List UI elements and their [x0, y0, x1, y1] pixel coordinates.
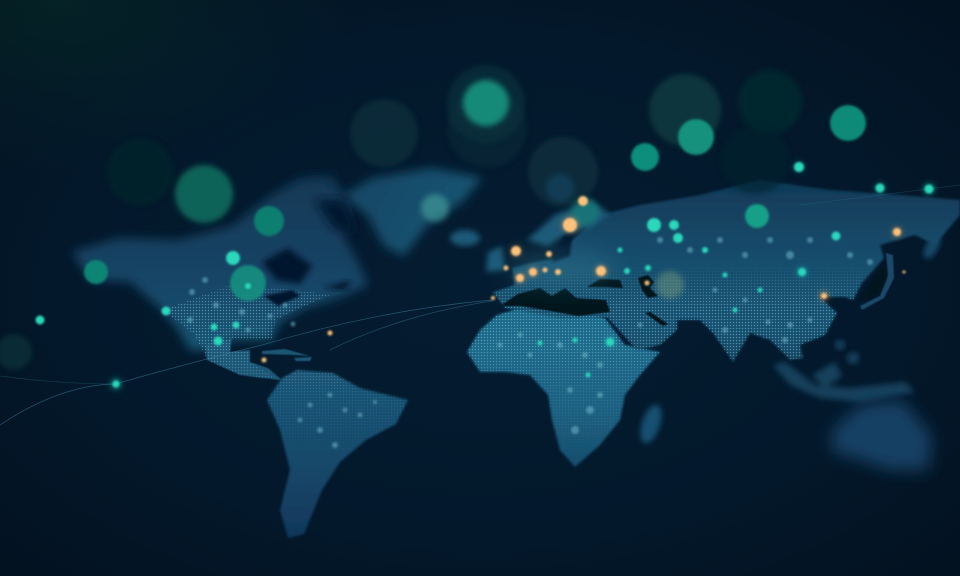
continent: Iceland — [450, 230, 480, 246]
large bokeh lights — [0, 65, 866, 370]
continent: British Isles — [486, 246, 505, 272]
continent: Japan — [860, 253, 894, 310]
sea: Sea of Japan — [860, 262, 886, 300]
sea: Baltic — [552, 234, 572, 262]
continent: Central America — [205, 338, 282, 380]
network lines — [0, 185, 960, 425]
sea: Gulf of St Lawrence — [322, 280, 352, 290]
continent: Australia — [832, 400, 932, 470]
continent: Indonesia islands — [847, 352, 859, 364]
continent: Greenland — [342, 168, 482, 256]
sea: Black Sea — [587, 279, 623, 288]
faint land lights — [187, 237, 873, 448]
continent: Kamchatka — [920, 233, 944, 261]
continent: North America — [72, 176, 368, 350]
orange city lights — [262, 196, 906, 362]
continent: Madagascar — [636, 402, 666, 446]
continent: Caribbean islands — [262, 349, 312, 361]
sea: Hudson Bay — [262, 248, 312, 284]
continent: Scandinavia — [527, 200, 610, 246]
sea: Great Lakes — [264, 290, 300, 306]
continent: Africa — [467, 308, 660, 467]
continent: Eurasia — [493, 180, 960, 362]
continent: South America — [267, 370, 408, 538]
world map — [70, 100, 960, 538]
bright haze over Europe — [505, 250, 615, 286]
continent: Southeast Asia — [773, 362, 915, 402]
sea: Davis Strait — [315, 200, 358, 235]
dot texture — [168, 271, 872, 437]
sea: Caspian — [638, 275, 658, 298]
teal city lights — [36, 162, 934, 389]
sea: Persian Gulf — [645, 312, 668, 326]
continent: Philippines — [835, 340, 845, 350]
sea: Mediterranean — [500, 288, 610, 316]
